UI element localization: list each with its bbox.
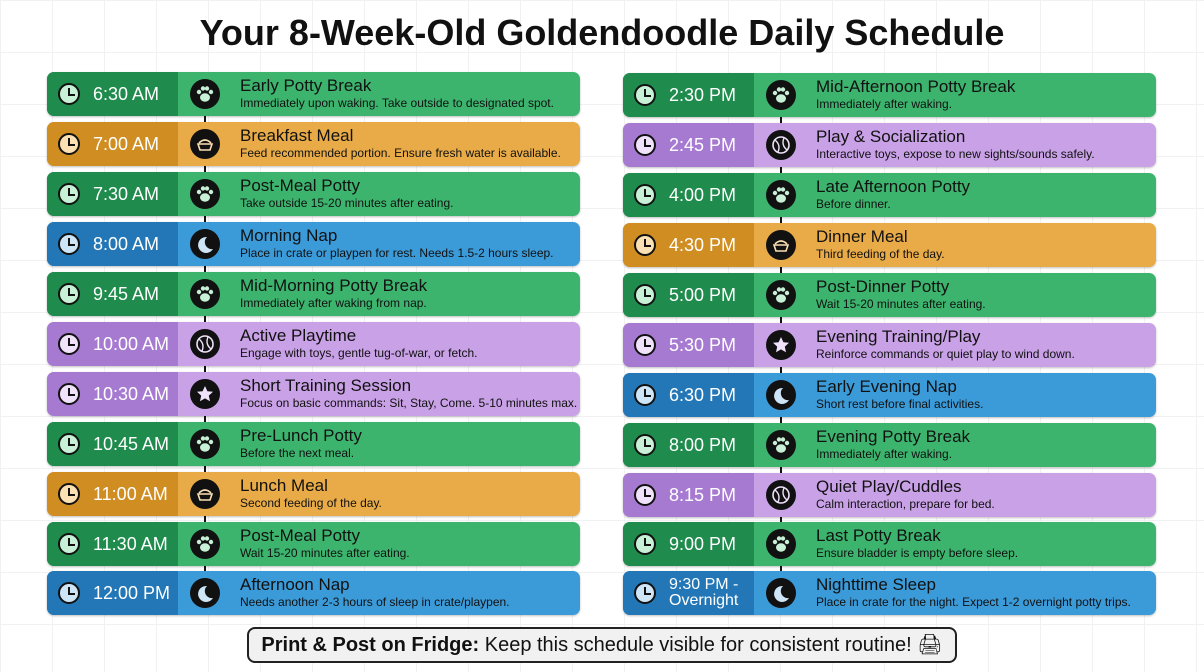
row 2:45 PM: Play & Socialization <box>816 127 965 146</box>
row 8:00 PM: Immediately after waking. <box>816 447 952 461</box>
row 2:45 PM: 2:45 PM <box>669 134 736 154</box>
row 6:30 PM: Short rest before final activities. <box>816 397 983 411</box>
row 11:00 AM: Second feeding of the day. <box>240 496 382 510</box>
row 12:00 PM: 12:00 PM <box>93 582 170 602</box>
right column <box>622 73 1157 617</box>
row 7:00 AM: Breakfast Meal <box>240 126 353 145</box>
row 4:00 PM: 4:00 PM <box>669 184 736 204</box>
timeline line right <box>780 95 782 595</box>
row 5:30 PM: Evening Training/Play <box>816 327 980 346</box>
title: Your 8-Week-Old Goldendoodle Daily Schedule <box>200 12 1004 53</box>
row 6:30 PM: Early Evening Nap <box>816 377 957 396</box>
row 8:15 PM: Quiet Play/Cuddles <box>816 477 962 496</box>
row 8:00 AM: 8:00 AM <box>93 234 159 254</box>
row 8:00 AM: Morning Nap <box>240 226 337 245</box>
row 2:30 PM: Immediately after waking. <box>816 97 952 111</box>
row 10:00 AM: 10:00 AM <box>93 334 169 354</box>
row 9:30 PM: 9:30 PM - <box>669 576 738 593</box>
row 9:00 PM: Ensure bladder is empty before sleep. <box>816 546 1018 560</box>
row 9:00 PM: 9:00 PM <box>669 534 736 554</box>
row 11:30 AM: Wait 15-20 minutes after eating. <box>240 546 410 560</box>
row 11:00 AM: 11:00 AM <box>93 484 168 504</box>
row 5:00 PM: Wait 15-20 minutes after eating. <box>816 297 986 311</box>
left column <box>46 72 581 617</box>
row 9:00 PM <box>623 522 1156 566</box>
row 2:30 PM: Mid-Afternoon Potty Break <box>816 77 1015 96</box>
row 10:00 AM: Engage with toys, gentle tug-of-war, or fetch. <box>240 346 477 360</box>
row 10:45 AM <box>47 422 580 466</box>
row 9:30 PM <box>623 571 1156 615</box>
row 7:30 AM <box>47 172 580 216</box>
row 9:00 PM: Last Potty Break <box>816 526 941 545</box>
row 7:00 AM <box>47 122 580 166</box>
row 11:30 AM: Post-Meal Potty <box>240 526 360 545</box>
footer callout: Print & Post on Fridge: Keep this schedule visible for consistent routine! 🖨 <box>261 634 943 656</box>
row 7:30 AM: 7:30 AM <box>93 184 159 204</box>
row 10:00 AM: Active Playtime <box>240 326 356 345</box>
row 12:00 PM <box>47 571 580 615</box>
row 10:30 AM: Short Training Session <box>240 376 411 395</box>
row 9:45 AM: Mid-Morning Potty Break <box>240 276 427 295</box>
row 8:15 PM <box>623 473 1156 517</box>
row 8:00 PM: Evening Potty Break <box>816 427 970 446</box>
row 6:30 AM: Immediately upon waking. Take outside to designated spot. <box>240 96 554 110</box>
row 8:00 AM: Place in crate or playpen for rest. Needs 1.5-2 hours sleep. <box>240 246 554 260</box>
row 5:30 PM <box>623 323 1156 367</box>
row 5:30 PM: 5:30 PM <box>669 334 736 354</box>
timeline line left <box>204 95 206 595</box>
row 4:00 PM: Late Afternoon Potty <box>816 177 970 196</box>
row 10:30 AM: 10:30 AM <box>93 384 169 404</box>
row 8:00 AM <box>47 222 580 266</box>
row 9:30 PM: Overnight <box>669 592 738 609</box>
row 6:30 AM: 6:30 AM <box>93 84 159 104</box>
row 10:00 AM <box>47 322 580 366</box>
row 4:00 PM <box>623 173 1156 217</box>
row 2:30 PM: 2:30 PM <box>669 84 736 104</box>
row 10:30 AM <box>47 372 580 416</box>
row 11:30 AM: 11:30 AM <box>93 534 168 554</box>
row 12:00 PM: Afternoon Nap <box>240 575 350 594</box>
row 9:45 AM: 9:45 AM <box>93 284 159 304</box>
row 4:30 PM: Dinner Meal <box>816 227 908 246</box>
row 4:30 PM: Third feeding of the day. <box>816 247 945 261</box>
row 5:00 PM <box>623 273 1156 317</box>
row 8:15 PM: Calm interaction, prepare for bed. <box>816 497 995 511</box>
row 8:15 PM: 8:15 PM <box>669 484 736 504</box>
row 10:45 AM: 10:45 AM <box>93 434 169 454</box>
row 11:30 AM <box>47 522 580 566</box>
row 10:30 AM: Focus on basic commands: Sit, Stay, Come. 5-10 minutes max. <box>240 396 577 410</box>
row 4:30 PM <box>623 223 1156 267</box>
row 2:30 PM <box>623 73 1156 117</box>
row 7:00 AM: 7:00 AM <box>93 134 159 154</box>
row 4:30 PM: 4:30 PM <box>669 234 736 254</box>
row 2:45 PM <box>623 123 1156 167</box>
row 9:30 PM: Nighttime Sleep <box>816 575 936 594</box>
row 7:30 AM: Take outside 15-20 minutes after eating. <box>240 196 453 210</box>
row 5:00 PM: Post-Dinner Potty <box>816 277 949 296</box>
row 6:30 AM: Early Potty Break <box>240 76 371 95</box>
row 9:45 AM: Immediately after waking from nap. <box>240 296 427 310</box>
row 9:30 PM: Place in crate for the night. Expect 1-2 overnight potty trips. <box>816 595 1131 609</box>
row 12:00 PM: Needs another 2-3 hours of sleep in crate/playpen. <box>240 595 510 609</box>
row 10:45 AM: Pre-Lunch Potty <box>240 426 362 445</box>
row 5:00 PM: 5:00 PM <box>669 284 736 304</box>
row 8:00 PM: 8:00 PM <box>669 434 736 454</box>
row 6:30 PM: 6:30 PM <box>669 384 736 404</box>
row 6:30 AM <box>47 72 580 116</box>
row 7:30 AM: Post-Meal Potty <box>240 176 360 195</box>
row 4:00 PM: Before dinner. <box>816 197 891 211</box>
row 11:00 AM: Lunch Meal <box>240 476 328 495</box>
row 11:00 AM <box>47 472 580 516</box>
row 8:00 PM <box>623 423 1156 467</box>
row 9:45 AM <box>47 272 580 316</box>
row 7:00 AM: Feed recommended portion. Ensure fresh water is available. <box>240 146 561 160</box>
footer callout <box>247 627 957 663</box>
row 6:30 PM <box>623 373 1156 417</box>
row 2:45 PM: Interactive toys, expose to new sights/sounds safely. <box>816 147 1095 161</box>
row 10:45 AM: Before the next meal. <box>240 446 354 460</box>
row 5:30 PM: Reinforce commands or quiet play to wind down. <box>816 347 1075 361</box>
